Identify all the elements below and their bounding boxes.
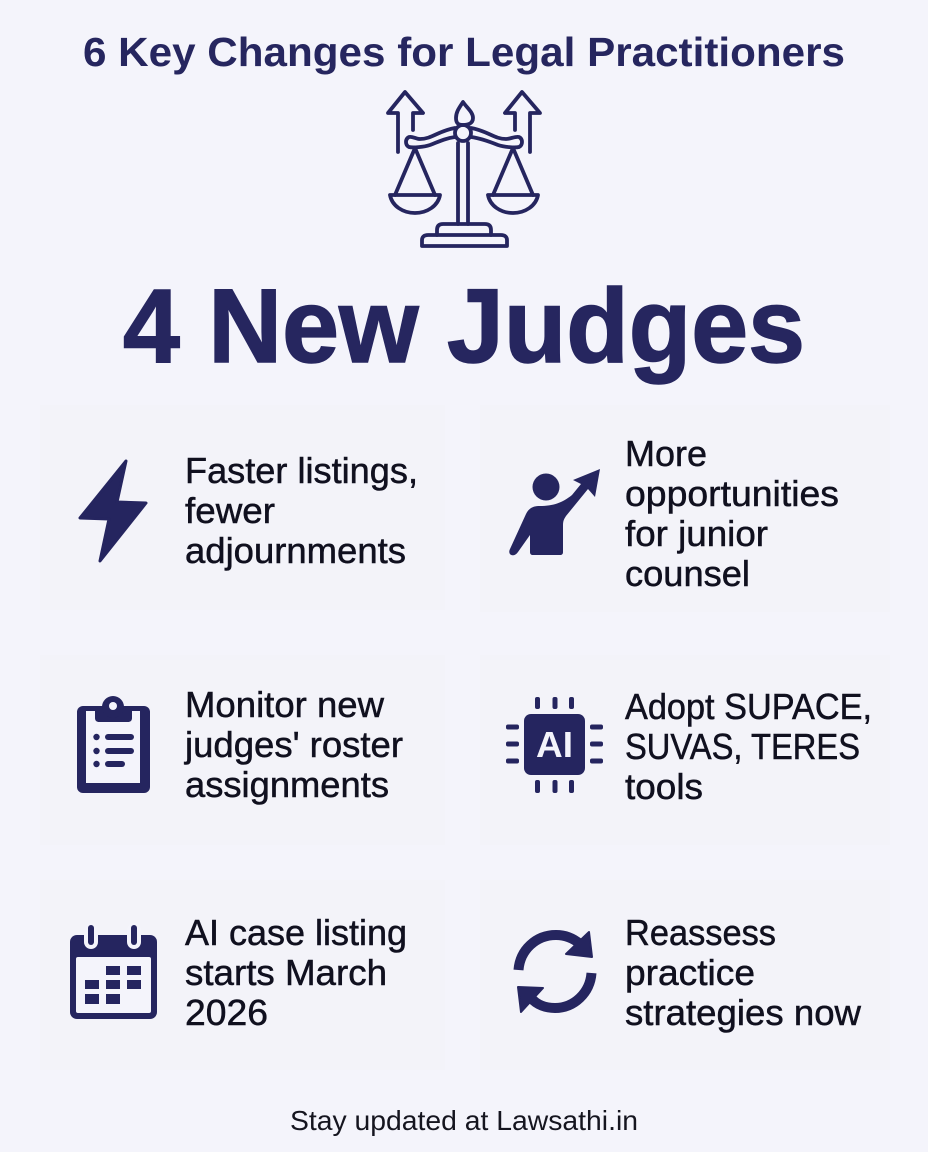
text: faster listings [185,450,418,571]
text: AI tools: Adopt SUPACE, [625,686,872,727]
text: AI tools: tools [625,766,703,807]
icon: AI chip: AI [536,724,573,765]
text: AI tools: SUVAS, TERES [625,726,860,767]
text: faster listings: fewer [185,490,275,531]
text: faster listings: adjournments [185,530,406,571]
icon: scales of justice with up arrows [388,92,540,246]
text: reassess strategies: strategies now [625,992,862,1033]
headline: 4 New Judges: 4 New Judges [123,268,805,385]
text: junior counsel: More [625,433,707,474]
icon: AI chip [506,697,603,793]
text: junior counsel: counsel [625,553,750,594]
panel: AI case listing [40,880,445,1070]
panel: faster listings [40,405,445,610]
icon: calendar [70,923,157,1019]
text: reassess strategies [625,912,862,1033]
text: junior counsel: opportunities [625,473,839,514]
panel: reassess strategies [480,880,890,1070]
text: monitor roster [184,684,403,805]
icon: person with rising arrow [509,469,600,555]
text: monitor roster: assignments [185,764,389,805]
text: monitor roster: Monitor new [185,684,385,725]
text: reassess strategies: Reassess [625,912,776,953]
text: AI tools [625,686,872,807]
footer: Stay updated at Lawsathi.in [290,1105,638,1136]
text: reassess strategies: practice [625,952,755,993]
text: monitor roster: judges' roster [184,724,403,765]
text: junior counsel [625,433,839,594]
icon: lightning bolt [80,461,146,561]
icon: refresh arrows [518,932,592,1012]
title: 6 Key Changes for Legal Practitioners [83,29,845,75]
text: junior counsel: for junior [625,513,768,554]
panel: junior counsel [480,405,890,612]
panel: monitor roster [40,655,445,845]
icon: clipboard checklist [77,696,150,793]
text: AI case listing [185,912,407,1033]
text: faster listings: Faster listings, [185,450,418,491]
text: AI case listing: AI case listing [185,912,407,953]
text: AI case listing: 2026 [185,992,268,1033]
panel: AI tools [480,655,890,845]
text: AI case listing: starts March [185,952,387,993]
